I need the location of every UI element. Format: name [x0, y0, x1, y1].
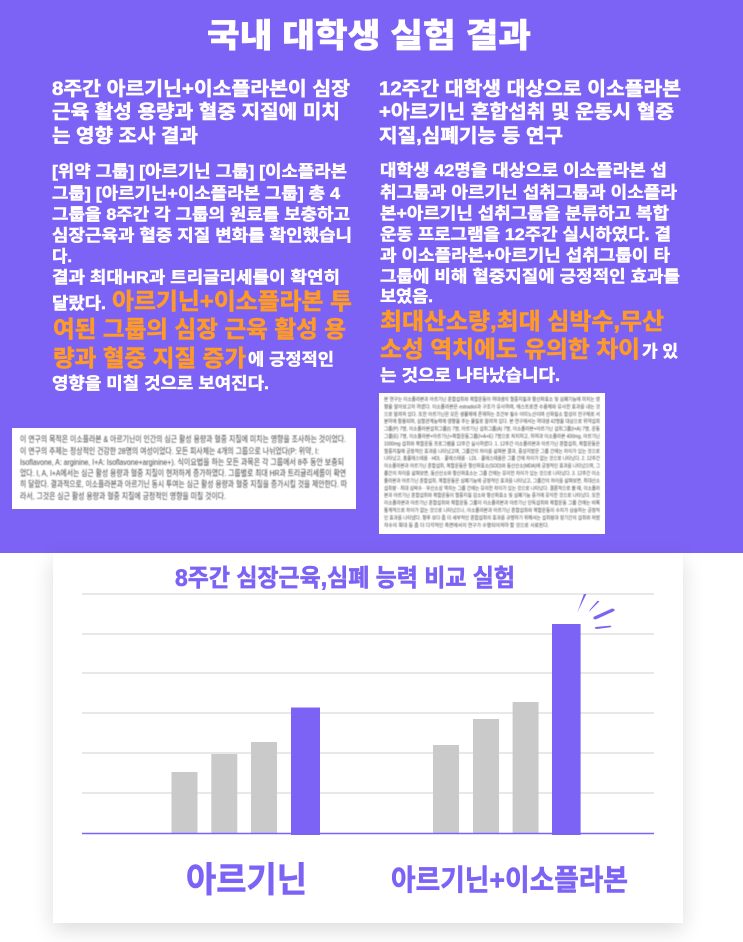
text block: right study description: 가 있: [642, 342, 678, 361]
text block: right study description: 그룹에 비해 혈중지질에 긍정적인 효과를: [380, 267, 680, 286]
panel: right abstract excerpt: 향을 알아보고자 하였다. 이소플라본은 estradiol과 구조가 유사하며, 에스트로겐 수용체와 유사한 효과를 내는 것: [384, 402, 600, 410]
heading: left study: 는 영향 조사 결과: [52, 125, 198, 147]
text block: left study description: 여된 그룹의 심장 근육 활성 용: [53, 316, 346, 342]
label: arginine plus isoflavone: 아르기닌+이소플라본: [391, 864, 628, 897]
heading: right study: [379, 78, 681, 147]
text block: right study description: 소성 역치에도 유의한 차이: [380, 336, 640, 362]
panel: right abstract excerpt: 혈중지질에 긍정적인 효과를 나타났고며, 그룹간의 차이를 살펴본 결과, 중성지방은 그룹 간에는 차이가 있는 것으로: [384, 447, 600, 455]
panel: right abstract excerpt: 인 효과를 나타냈다. 향후 보다 좀 더 세부적인 혼합섭취의 효과를 규명하기 위해서는 섭취량과 장기간의 섭취와 처방: [384, 513, 600, 521]
heading: left study: 근육 활성 용량과 혈중 지질에 미치: [52, 101, 340, 123]
panel: left abstract excerpt: 히 달랐다. 결과적으로, 이소플라본과 아르기닌 동시 투여는 심근 활성 용량과 혈중 지질을 증가시킬 것을 제안한다. 따: [20, 478, 347, 489]
text block: right study description: 보였음.: [380, 287, 433, 306]
text block: left study description: 영향을 미칠 것으로 보여진다.: [52, 374, 269, 393]
text block: right study description: 대학생 42명을 대상으로 이소플라본 섭: [380, 161, 667, 180]
panel: left abstract excerpt: [12, 428, 356, 509]
panel: left abstract excerpt: 었다. I, A, I+A에서는 심근 활성 용량과 혈중 지질이 현저하게 증가하였다. 그룹별로 최대 HR과 트리글리세롤이 확연: [20, 467, 346, 478]
text block: left study description: 에 긍정적인: [248, 350, 334, 369]
panel: right abstract excerpt: 나타났고, 총콜레스테롤 · HDL · 콜레스테롤 · LDL · 콜레스테롤은 그룹 간에 차이가 없는 것으로 나타났다. 2. 12주간: [384, 454, 600, 462]
panel: right abstract excerpt: 본 연구는 이소플라본과 아르기닌 혼합섭취와 복합운동이 여대생의 혈중지질과 항산화효소 및 심폐기능에 미치는 영: [384, 395, 600, 403]
heading: right study: +아르기닌 혼합섭취 및 운동시 혈중: [379, 101, 674, 123]
panel: right abstract excerpt: 1000mg 섭취와 복합운동 프로그램을 12주간 실시하였다. 1. 12주간 이소플라본과 아르기닌 혼합섭취, 복합운동은: [384, 439, 600, 447]
text block: right study description: 운동 프로그램을 12주간 실시하였다. 결: [380, 225, 671, 244]
chart heading: 8주간 심장근육,심폐 능력 비교 실험: [175, 565, 515, 592]
text block: left study description: [위약 그룹] [아르기닌 그룹] [이소플라본: [52, 162, 347, 181]
bar: arginine highlight: [291, 708, 320, 835]
panel: chart card: [53, 553, 683, 923]
icon: emphasis burst marks: [577, 594, 615, 629]
panel: right abstract excerpt: 섭취량 · 최대 심박수 · 무산소성 역치는 그룹 간에는 유의한 차이가 있는 것으로 나타났다. 결론적으로 볼 때, 이소플라: [384, 484, 600, 492]
panel: right abstract excerpt: 플라본과 아르기닌 혼합섭취, 복합운동은 심폐기능에 긍정적인 효과를 나타났고, 그룹간의 차이를 살펴보면, 최대산소: [384, 476, 600, 484]
text block: left study description: 아르기닌+이소플라본 투: [112, 288, 352, 314]
text block: right study description: [380, 161, 680, 385]
heading: left study: 8주간 아르기닌+이소플라본이 심장: [52, 78, 350, 100]
panel: right abstract excerpt: 이소플라본과 아르기닌 혼합섭취와 복합운동 그룹이 이소플라본과 아르기닌 단독섭취와 복합운동 그룹 간에는 비록: [384, 499, 600, 507]
heading: right study: 12주간 대학생 대상으로 이소플라본: [379, 78, 681, 100]
label: arginine: 아르기닌: [186, 861, 307, 900]
text block: left study description: 다.: [52, 247, 72, 266]
bars: arginine plus isoflavone group: [433, 702, 539, 833]
panel: left abstract excerpt: 라서, 그것은 심근 활성 용량과 혈중 지질에 긍정적인 영향을 미칠 것이다.: [20, 490, 226, 501]
text block: left study description: 심장근육과 혈중 지질 변화를 확인했습니: [52, 225, 352, 245]
text block: right study description: 최대산소량,최대 심박수,무산: [380, 308, 664, 334]
panel: right abstract excerpt: [379, 393, 605, 534]
panel: right abstract excerpt: 통계적으로 차이가 없는 것으로 나타났으나, 이소플라본과 아르기닌 혼합섭취와 복합운동의 수치가 상승하는 긍정적: [384, 506, 600, 514]
purple background panel: [0, 0, 743, 553]
text block: left study description: 그룹을 8주간 각 그룹의 원료를 보충하고: [52, 205, 350, 224]
text block: left study description: 량과 혈중 지질 증가: [53, 345, 246, 371]
panel: left abstract excerpt: Isoflavone, A: arginine, I+A: Isoflavone+arginine+). 식이요법을 하는 모든 과목은 각 그룹에서 8주 동안 보충되: [20, 456, 344, 467]
panel: right abstract excerpt: 으로 알려져 있다. 또한 아르기닌은 모든 생물체에 존재하는 조건부 필수 아미노산이며 산화질소 합성의 전구체로 서: [384, 410, 600, 418]
panel: right abstract excerpt: 그룹(E) 7명, 이소플라본+아르기닌+복합운동그룹(I+A+E) 7명으로 처치하고, 하여과 이소플라본 400mg, 아르기닌: [384, 432, 600, 440]
bar: arginine plus isoflavone highlight: [552, 624, 581, 835]
panel: right abstract excerpt: 분야에 활용되며, 심혈관계능력에 영향을 주는 물질로 알려져 있다. 본 연구에서는 여대생 42명을 대상으로 위약섭취: [384, 417, 600, 425]
heading: left study: [52, 78, 350, 147]
panel: right abstract excerpt: 자수의 확대 등 좀 더 다각적인 측면에서의 연구가 수행되어져야 할 것으로 사료된다.: [384, 521, 549, 529]
panel: right abstract excerpt: 그룹(P) 7명, 이소플라본섭취그룹(I) 7명, 아르기닌 섭취그룹(A) 7명, 이소플라본+아르기닌 섭취그룹(I+A) 7명, 운동: [384, 425, 600, 433]
text block: right study description: 과 이소플라본+아르기닌 섭취그룹이 타: [380, 246, 670, 265]
text block: left study description: 달랐다.: [52, 294, 106, 313]
panel: left abstract excerpt: 이 연구의 목적은 이소플라본 & 아르기닌이 인간의 심근 활성 용량과 혈중 지질에 미치는 영향을 조사하는 것이었다.: [20, 433, 346, 444]
panel: right abstract excerpt: 룹간의 차이를 살펴보면, 동산산소와 항산화효소는 그룹 간에는 유의한 차이가 있는 것으로 나타났다. 3. 12주간 이소: [384, 469, 600, 477]
text block: right study description: 취그룹과 아르기닌 섭취그룹과 이소플라: [380, 183, 677, 202]
text block: left study description: 결과 최대HR과 트리글리세롤이 확연히: [52, 268, 340, 287]
text block: right study description: 는 것으로 나타났습니다.: [380, 366, 560, 385]
bars: arginine group: [172, 742, 277, 833]
text block: right study description: 본+아르기닌 섭취그룹을 분류하고 복합: [380, 204, 669, 223]
panel: right abstract excerpt: 이소플라본과 아르기닌 혼합섭취, 복합운동은 항산화효소(SOD)와 동산산소(MDA)에 긍정적인 효과를 나타났으며, 그: [384, 462, 600, 470]
text block: left study description: 그룹] [아르기닌+이소플라본 그룹] 총 4: [52, 184, 341, 203]
panel: left abstract excerpt: 이 연구의 주제는 정상적인 건강한 28명의 여성이었다. 모든 피사체는 4개의 그룹으로 나뉘었다(P: 위약, I:: [20, 445, 319, 456]
panel: right abstract excerpt: 본과 아르기닌 혼합섭취와 복합운동이 혈중지질 감소와 항산화효소 및 심폐기능 증가에 유익한 것으로 나타났다. 또한: [384, 491, 600, 499]
title: 국내 대학생 실험 결과: [207, 17, 531, 54]
heading: right study: 지질,심폐기능 등 연구: [379, 125, 563, 147]
bar chart: [82, 594, 654, 835]
text block: left study description: [52, 162, 352, 393]
